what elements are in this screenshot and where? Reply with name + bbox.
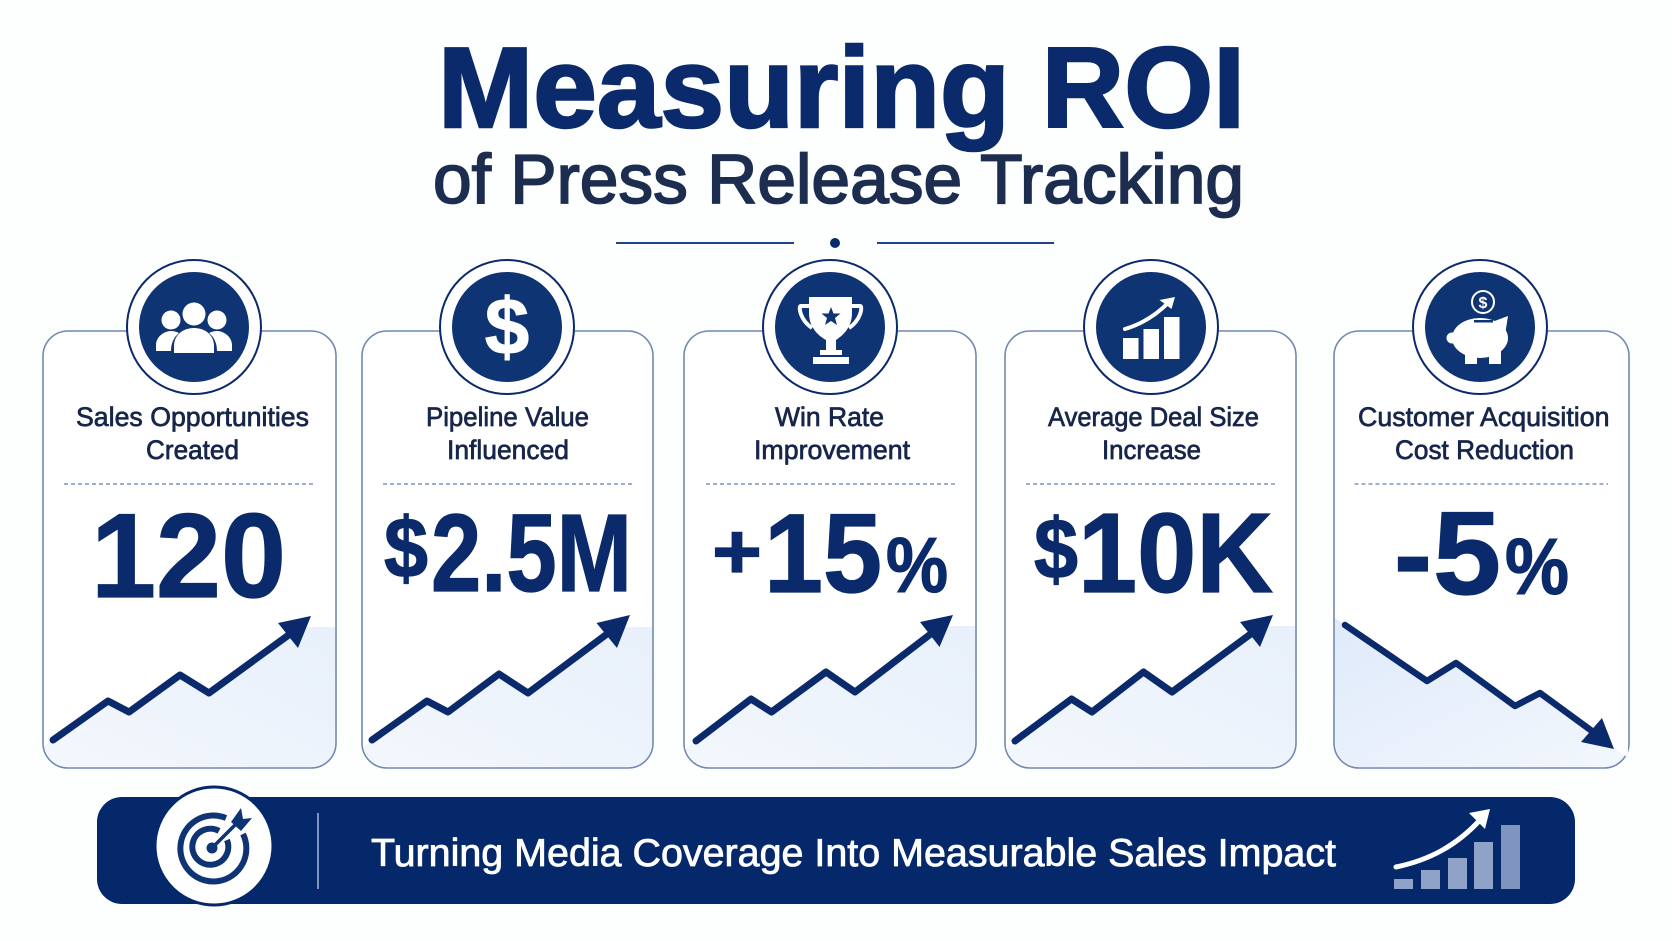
label: Win Rate (775, 402, 884, 432)
tagline: Turning Media Coverage Into Measurable Sales Impact (371, 832, 1336, 875)
panel: customer acquisition cost (1334, 260, 1629, 768)
title divider (616, 238, 1054, 248)
panel: sales opportunities (43, 260, 336, 768)
trend line up (696, 615, 953, 741)
value: 5 (1433, 488, 1501, 620)
title (433, 25, 1245, 218)
trend line up (1015, 615, 1273, 741)
chart area fill (685, 626, 975, 767)
label: Influenced (447, 435, 569, 465)
value: % (1505, 522, 1569, 611)
banner (97, 787, 1575, 905)
trend line up (53, 616, 311, 740)
label: Customer Acquisition (1358, 402, 1610, 432)
label: Pipeline Value (426, 402, 589, 432)
label: Increase (1102, 435, 1201, 465)
panel: win rate (684, 260, 976, 768)
label: Average Deal Size (1048, 402, 1259, 432)
trend line down (1345, 625, 1614, 749)
value: $ (1034, 502, 1078, 597)
icon: trophy (763, 260, 897, 394)
label: Created (146, 435, 239, 465)
chart area fill (363, 627, 652, 767)
icon: piggy bank (1413, 260, 1547, 394)
heading: Measuring ROI: Measuring ROI (438, 25, 1245, 152)
icon: target with arrow (155, 787, 273, 905)
chart area fill (44, 627, 335, 767)
icon: rising bars (1394, 809, 1520, 889)
label: Improvement (754, 435, 911, 465)
label: Cost Reduction (1395, 435, 1574, 465)
value: $ (384, 501, 428, 596)
value: 2.5M (431, 492, 632, 615)
chart area fill (1335, 618, 1628, 767)
subheading: of Press Release Tracking: of Press Release Tracking (433, 140, 1244, 218)
value: + (712, 507, 762, 595)
value: 120 (91, 489, 286, 623)
panel: pipeline value (362, 260, 653, 768)
icon: people (127, 260, 261, 394)
chart area fill (1006, 626, 1295, 767)
icon: bar chart with arrow (1084, 260, 1218, 394)
panel: average deal size (1005, 260, 1296, 768)
trend line up (372, 615, 630, 740)
value: 10K (1078, 490, 1273, 616)
icon: dollar: $ (485, 282, 529, 371)
value: - (1394, 489, 1432, 619)
label: Sales Opportunities (76, 402, 309, 432)
value: 15 (764, 491, 882, 616)
icon: piggy bank: $ (1479, 295, 1488, 312)
icon: dollar (440, 260, 574, 394)
value: % (886, 521, 948, 609)
